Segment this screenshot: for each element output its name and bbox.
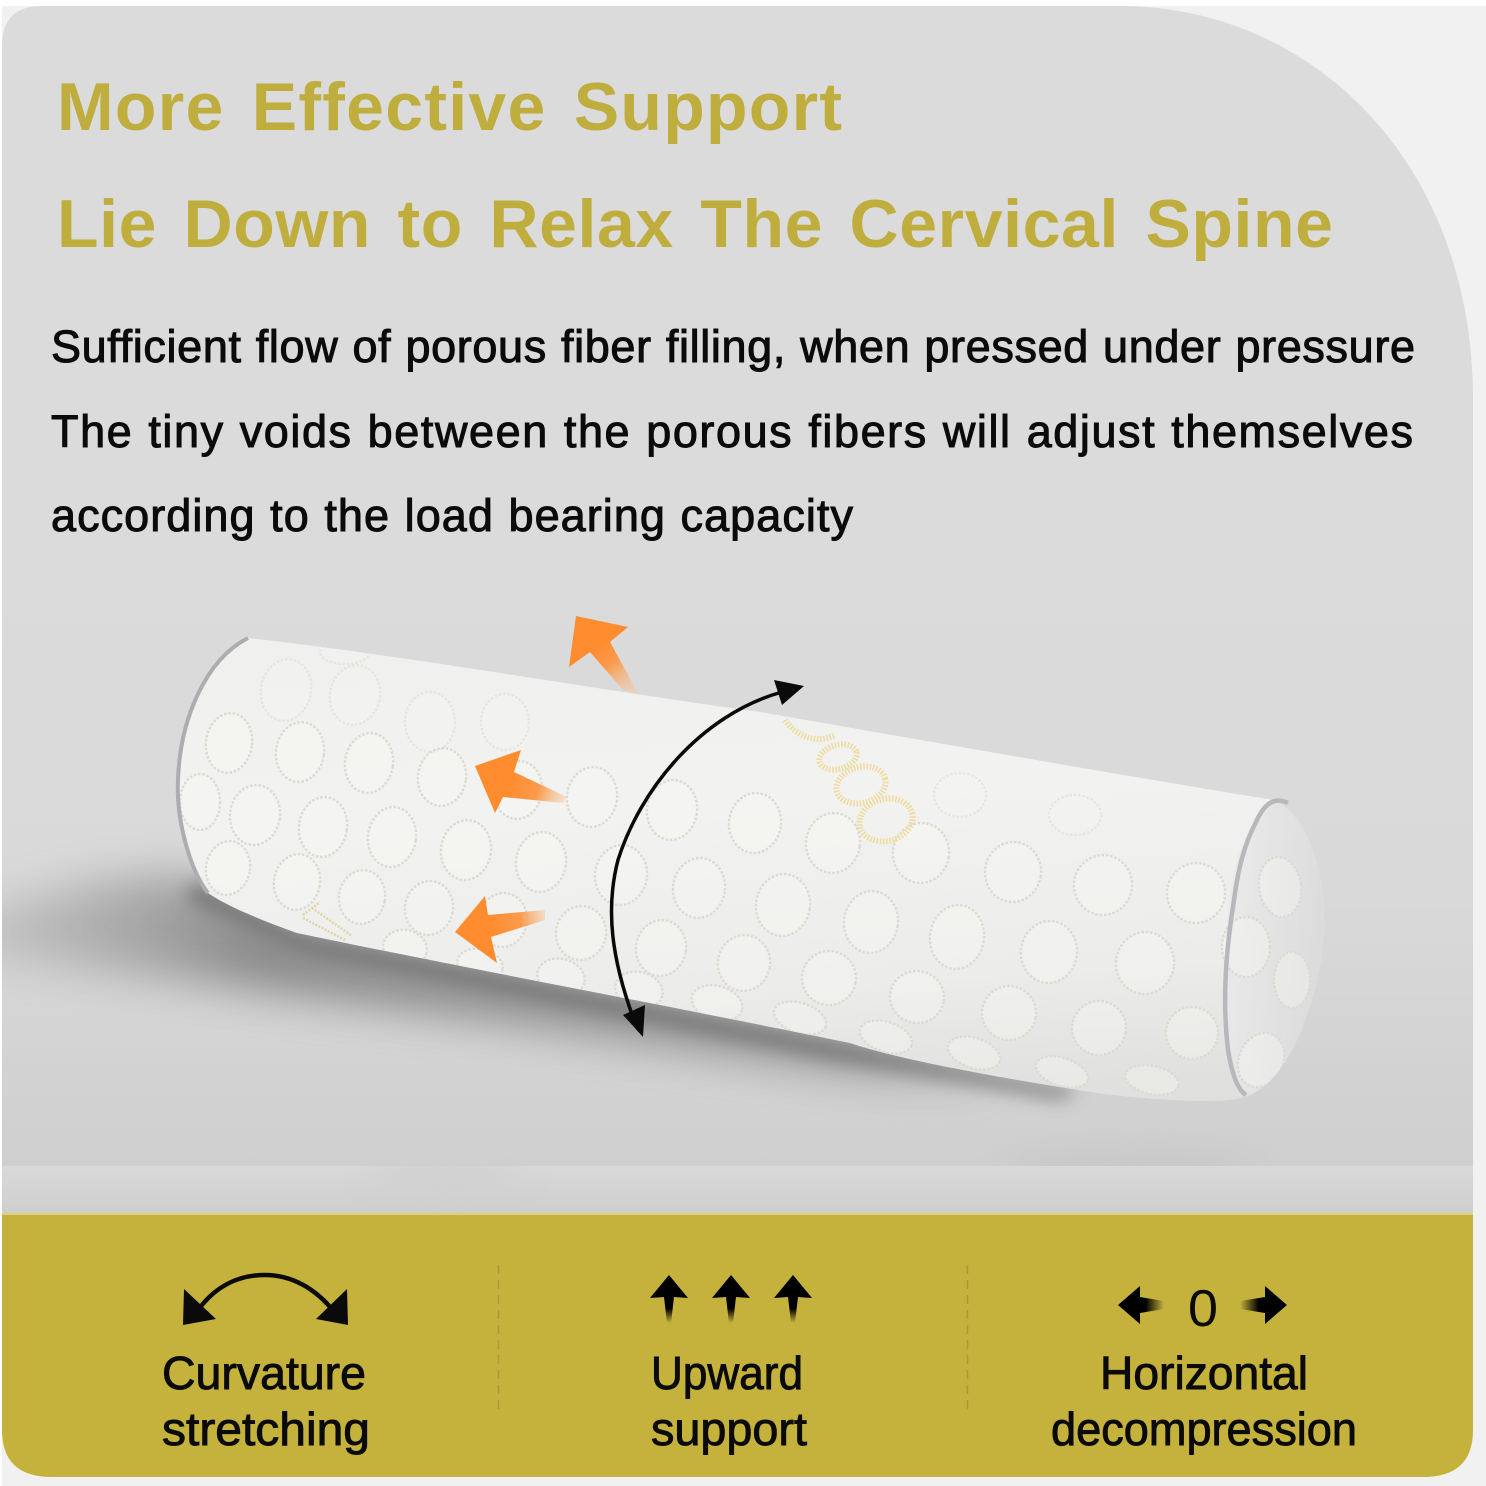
grey piping left xyxy=(178,638,248,893)
panel: gold feature bar xyxy=(0,1213,1486,1483)
arrow: black curved double arrow xyxy=(611,680,804,1037)
body text: The tiny voids between the porous fibers will adjust themselves xyxy=(51,406,1413,457)
label: decompression xyxy=(1051,1403,1357,1455)
icon: horizontal arrows: 0 xyxy=(1188,1280,1218,1338)
gold stitched mark xyxy=(303,902,352,940)
quilted dimples xyxy=(180,640,1310,1099)
grey piping right xyxy=(1225,801,1288,1095)
body text: according to the load bearing capacity xyxy=(51,490,854,541)
label: support xyxy=(651,1403,807,1455)
divider xyxy=(966,1265,968,1415)
body text: Sufficient flow of porous fiber filling, when pressed under pressure xyxy=(51,321,1415,372)
arrow: orange up-left xyxy=(569,616,639,695)
feature: horizontal decompression xyxy=(1051,1280,1357,1455)
pillow body xyxy=(178,638,1324,1101)
icon: curved arrows xyxy=(183,1275,348,1325)
label: Upward xyxy=(651,1347,803,1399)
label: Horizontal xyxy=(1100,1347,1308,1399)
pillow end cap xyxy=(1250,803,1324,1020)
body text xyxy=(51,321,1415,541)
arrow: orange lower-left xyxy=(455,896,545,963)
icon: three up arrows xyxy=(650,1275,812,1323)
icon: horizontal arrows xyxy=(1118,1280,1287,1338)
title xyxy=(57,69,1333,262)
pillow shadow xyxy=(0,876,1260,1179)
pillow illustration xyxy=(178,638,1324,1101)
label: Curvature xyxy=(162,1347,366,1399)
title: More Effective Support xyxy=(57,69,842,145)
feature: upward support xyxy=(650,1275,812,1455)
divider xyxy=(498,1265,500,1415)
title: Lie Down to Relax The Cervical Spine xyxy=(57,186,1333,262)
feature: curvature stretching xyxy=(162,1275,370,1455)
label: stretching xyxy=(162,1403,370,1455)
arrow: orange left xyxy=(475,750,567,813)
gold stitched logo xyxy=(785,720,918,847)
